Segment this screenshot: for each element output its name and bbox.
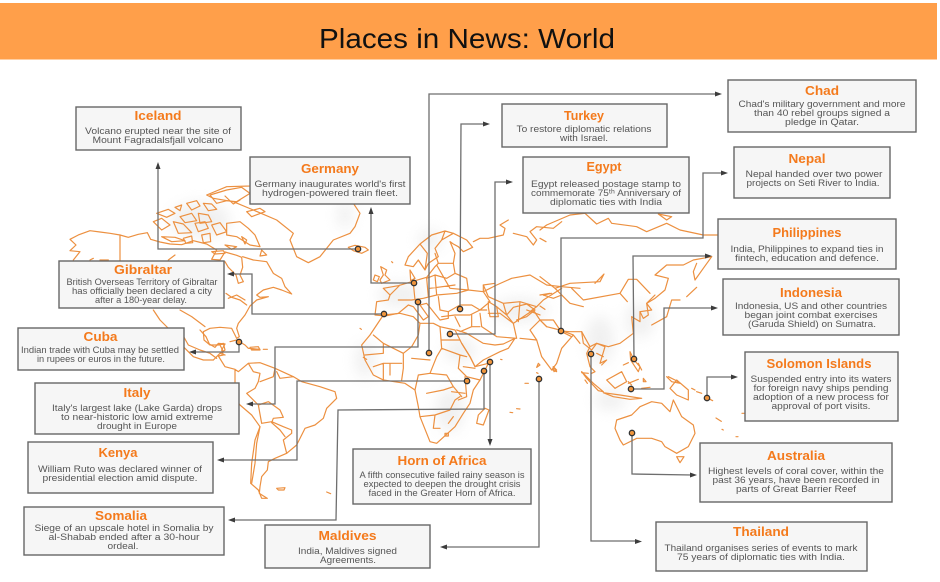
text: Indonesia: (Garuda Shield) on Sumatra. <box>748 318 876 329</box>
text: Solomon Islands: approval of port visits. <box>772 400 870 411</box>
heading: Turkey: Turkey <box>564 108 605 123</box>
text: Cuba: in rupees or euros in the future. <box>37 353 165 364</box>
panel: Gibraltar <box>59 261 224 308</box>
text: Iceland: Mount Fagradalsfjall volcano <box>92 134 224 145</box>
panel: Indonesia <box>723 279 899 335</box>
text: Egypt: diplomatic ties with India <box>550 196 663 207</box>
heading: Chad: Chad <box>805 83 839 98</box>
text: Italy: drought in Europe <box>97 420 177 431</box>
text: Egypt <box>531 178 681 207</box>
East and Southeast Asia <box>540 213 718 373</box>
text: Horn of Africa: expected to deepen the drought crisis <box>364 478 521 489</box>
text: Egypt: Egypt released postage stamp to <box>531 178 681 189</box>
text: Chad: than 40 rebel groups signed a <box>754 107 891 118</box>
text: Gibraltar <box>66 276 218 305</box>
text: Australia: past 36 years, have been recorded in <box>712 474 880 485</box>
panel: Horn of Africa <box>353 449 531 504</box>
text: Thailand: 75 years of diplomatic ties with India. <box>677 551 845 562</box>
text: Thailand: Thailand organises series of events to mark <box>664 542 858 553</box>
heading: Germany: Germany <box>301 161 360 176</box>
text: Philippines: India, Philippines to expand ties in <box>730 243 884 254</box>
panel: Germany <box>250 157 410 204</box>
North and Central America <box>70 187 292 360</box>
text: Australia: Highest levels of coral cover, within the <box>708 465 884 476</box>
text: Chad: Chad's military government and more <box>738 98 906 109</box>
heading: Iceland: Iceland <box>134 108 182 123</box>
arrow: Solomon Islands connector <box>704 374 738 401</box>
text: Kenya <box>38 463 202 483</box>
text: Kenya: presidential election amid dispute. <box>42 472 198 483</box>
heading: Gibraltar: Gibraltar <box>114 262 172 277</box>
title banner <box>0 3 937 60</box>
text: Germany: Germany inaugurates world's first <box>254 178 406 189</box>
text: Kenya: William Ruto was declared winner of <box>38 463 202 474</box>
text: Turkey: To restore diplomatic relations <box>516 123 652 134</box>
panel: Turkey <box>502 104 667 147</box>
map shading <box>170 201 654 432</box>
text: Turkey: with Israel. <box>559 132 608 143</box>
text: Solomon Islands <box>750 373 892 411</box>
arrow: Kenya connector <box>217 378 470 462</box>
text: Gibraltar: after a 180-year delay. <box>95 294 187 305</box>
panel: Thailand <box>656 522 867 571</box>
text: Italy: to near-historic low amid extreme <box>61 411 213 422</box>
heading: Somalia: Somalia <box>95 508 148 523</box>
text: Italy: Italy's largest lake (Lake Garda) drops <box>52 402 222 413</box>
South America and Caribbean <box>180 330 337 498</box>
arrow: Maldives connector <box>440 376 542 550</box>
text: Cuba <box>21 344 179 364</box>
text: Germany <box>254 178 406 198</box>
arrow: Italy connector <box>246 299 421 406</box>
world map <box>70 182 744 498</box>
text: Egypt: commemorate 75ᵗʰ Anniversary of <box>531 187 681 198</box>
text: Chad <box>738 98 906 127</box>
arrow: Cuba connector <box>189 339 242 354</box>
text: Gibraltar: British Overseas Territory of Gibraltar <box>66 276 218 287</box>
text: Cuba: Indian trade with Cuba may be settled <box>21 344 179 355</box>
arrow: Nepal connector <box>558 170 728 334</box>
text: Nepal: Nepal handed over two power <box>746 168 882 179</box>
arrow: Indonesia connector <box>628 306 718 392</box>
arrow: Australia connector <box>629 430 697 478</box>
text: Horn of Africa: A fifth consecutive failed rainy season is <box>360 469 525 480</box>
text: Germany: hydrogen-powered train fleet. <box>262 187 398 198</box>
arrow: Egypt connector <box>447 180 513 337</box>
text: Somalia <box>34 522 214 551</box>
text: Nepal <box>746 168 882 188</box>
panel: Kenya <box>28 442 213 493</box>
arrow: Horn of Africa connector <box>487 359 493 446</box>
text: Iceland <box>85 125 231 145</box>
arrow: Iceland connector <box>156 162 361 252</box>
heading: Solomon Islands: Solomon Islands <box>766 356 872 371</box>
panel: Solomon Islands <box>745 352 898 421</box>
text: Italy <box>52 402 222 431</box>
Europe Africa and western Asia <box>348 220 580 443</box>
text: Australia <box>708 465 884 494</box>
text: Maldives <box>298 545 397 565</box>
title: Places in News: World <box>319 23 615 54</box>
arrow: Turkey connector <box>457 122 490 312</box>
panel: Egypt <box>523 157 689 213</box>
Arctic islands <box>153 187 267 256</box>
Greenland <box>207 182 360 263</box>
heading: Maldives: Maldives <box>318 528 376 543</box>
heading: Cuba: Cuba <box>84 329 118 344</box>
text: Australia: parts of Great Barrier Reef <box>736 483 856 494</box>
heading: Thailand: Thailand <box>733 524 789 539</box>
panel: Iceland <box>76 107 241 150</box>
text: Thailand <box>664 542 858 562</box>
heading: Italy: Italy <box>124 385 151 400</box>
panel: Nepal <box>734 147 890 198</box>
text: Solomon Islands: Suspended entry into its waters <box>750 373 892 384</box>
text: Indonesia <box>735 300 887 329</box>
heading: Horn of Africa: Horn of Africa <box>398 453 487 468</box>
text: Solomon Islands: for foreign navy ships pending <box>754 382 888 393</box>
Indonesia, Australia and Pacific <box>582 363 744 463</box>
heading: Egypt: Egypt <box>586 159 622 174</box>
heading: Philippines: Philippines <box>772 225 842 240</box>
text: Indonesia: began joint combat exercises <box>744 309 878 320</box>
text: Philippines: fintech, education and defence. <box>735 252 879 263</box>
arrow: Somalia connector <box>228 368 487 522</box>
heading: Indonesia: Indonesia <box>780 285 843 300</box>
text: Horn of Africa: faced in the Greater Horn of Africa. <box>368 487 516 498</box>
panel: Chad <box>728 80 916 132</box>
arrow: Gibraltar connector <box>227 272 387 317</box>
panel: Australia <box>700 443 892 502</box>
text: Nepal: projects on Seti River to India. <box>746 177 880 188</box>
text: Horn of Africa <box>360 469 525 498</box>
text: Gibraltar: has officially been declared a city <box>72 285 212 296</box>
heading: Nepal: Nepal <box>788 151 826 166</box>
panel: Cuba <box>18 328 184 370</box>
Africa <box>362 313 488 443</box>
text: Philippines <box>730 243 884 263</box>
panel: Somalia <box>24 507 224 555</box>
text: Chad: pledge in Qatar. <box>785 116 859 127</box>
text: Maldives: Agreements. <box>320 554 376 565</box>
panel: Maldives <box>265 525 430 568</box>
text: Turkey <box>516 123 652 143</box>
panel: Philippines <box>718 219 896 269</box>
panel: Italy <box>35 383 239 434</box>
heading: Australia: Australia <box>767 448 826 463</box>
text: Somalia: Siege of an upscale hotel in Somalia by <box>34 522 214 533</box>
heading: Kenya: Kenya <box>98 445 138 460</box>
text: Somalia: ordeal. <box>108 540 138 551</box>
text: Somalia: al-Shabab ended after a 30-hour <box>48 531 200 542</box>
arrow: Thailand connector <box>588 351 642 544</box>
arrow: Philippines connector <box>631 254 712 362</box>
arrow: Chad connector <box>426 92 722 356</box>
arrow: Germany connector <box>368 207 417 286</box>
text: Solomon Islands: adoption of a new process for <box>753 391 889 402</box>
Middle East and South Asia <box>455 310 540 367</box>
text: Maldives: India, Maldives signed <box>298 545 397 556</box>
text: Iceland: Volcano erupted near the site of <box>85 125 231 136</box>
text: Indonesia: Indonesia, US and other countries <box>735 300 887 311</box>
